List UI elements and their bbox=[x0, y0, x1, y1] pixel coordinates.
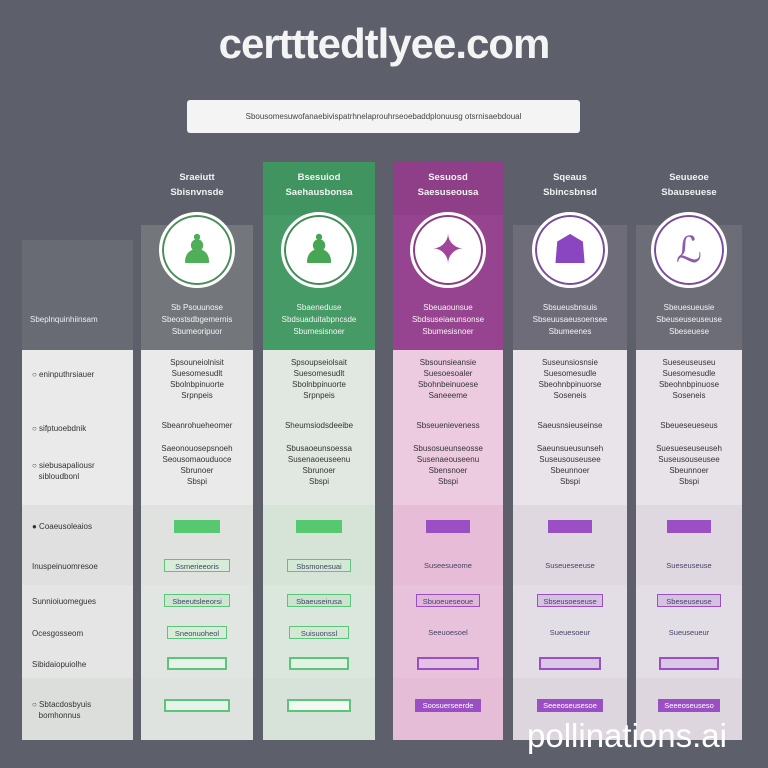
icon bbox=[159, 212, 235, 288]
label: row 7: Sibidaiopuiolhe bbox=[32, 660, 86, 669]
icon: ℒ bbox=[676, 229, 702, 270]
panel: column 3 (purple highlighted): Sbseuenieveness bbox=[416, 421, 480, 430]
panel: column 5: Suesomesudle bbox=[663, 369, 715, 378]
panel: column 5 bbox=[636, 172, 742, 740]
label: row 4: Inuspeinuomresoe bbox=[32, 562, 98, 571]
panel: column 1 (gray/green): Sbrunoer bbox=[181, 466, 213, 475]
heading bbox=[418, 172, 478, 198]
panel: column 5: Sbeseuseuse bbox=[666, 597, 712, 606]
panel: column 3 (purple highlighted): Suseesueome bbox=[424, 561, 472, 570]
button purple bbox=[548, 520, 592, 533]
panel: column 4: Sbeohnbpinuorse bbox=[539, 380, 601, 389]
panel: column 3 (purple highlighted): Suesoesoaler bbox=[424, 369, 472, 378]
heading: Sbincsbnsd bbox=[543, 187, 597, 198]
search bar bbox=[187, 100, 580, 133]
panel: column 5: Sbeueseueseus bbox=[660, 421, 718, 430]
icon bbox=[651, 212, 727, 288]
heading bbox=[170, 172, 224, 198]
search bar: Sbousomesuwofanaebivispatrhnelaprouhrseoebaddplonuusg otsrnisaebdoual bbox=[246, 112, 521, 121]
panel: column 1 (gray/green): Suesomesudlt bbox=[172, 369, 222, 378]
panel: column 2 (green highlighted): Suisuonssl bbox=[301, 629, 337, 638]
label: row 8 bbox=[32, 700, 91, 720]
panel: column 2 (green highlighted): Sbolnbpinuorte bbox=[292, 380, 346, 389]
panel: column 4: Suseueseeuse bbox=[545, 561, 595, 570]
heading: Saehausbonsa bbox=[285, 187, 353, 198]
panel: column 1 (gray/green): Sbumeoripuor bbox=[172, 327, 222, 336]
label: row 6: Ocesgosseom bbox=[32, 629, 83, 638]
icon bbox=[532, 212, 608, 288]
panel: column 2 (green highlighted): Sbaeuseirusa bbox=[296, 597, 342, 606]
panel: column 4: Suseunsiosnsie bbox=[542, 358, 598, 367]
panel: column 3 (purple highlighted): Sbumesisnoer bbox=[422, 327, 474, 336]
panel: column 4: Sbseusoeseuse bbox=[543, 597, 597, 606]
panel: column 5: Sueseuseuse bbox=[666, 561, 712, 570]
icon: ✦ bbox=[431, 228, 465, 272]
panel: column 3 (purple highlighted): Seeuoesoel bbox=[428, 628, 468, 637]
panel: column 5: Sbeohnbpinuose bbox=[659, 380, 719, 389]
panel: column 5: Sueuseueur bbox=[669, 628, 709, 637]
panel: column 2 (green highlighted): Sbdsuaduitabpncsde bbox=[282, 315, 356, 324]
panel: column 3 (purple highlighted): Sbdsuseiaeunsonse bbox=[412, 315, 484, 324]
panel: column 5: Sbeuseuseuseuse bbox=[656, 315, 722, 324]
heading: Bsesuiod bbox=[298, 172, 340, 183]
panel: column 3 (purple highlighted): Saneeeme bbox=[429, 391, 467, 400]
panel: column 1 (gray/green): Seousomaouduoce bbox=[163, 455, 231, 464]
panel: column 3 (purple highlighted): Susenaeouseenu bbox=[417, 455, 479, 464]
panel: column 4: Sbspi bbox=[560, 477, 580, 486]
heading: Saesuseousa bbox=[418, 187, 478, 198]
panel: column 1 (gray/green): Srpnpeis bbox=[181, 391, 213, 400]
panel: column 3 (purple highlighted): Sbsounsieansie bbox=[420, 358, 476, 367]
panel: column 1 (gray/green): Sbeeutsleeorsi bbox=[172, 597, 222, 606]
button green bbox=[174, 520, 220, 533]
panel: column 2 (green highlighted): Suesomesudlt bbox=[294, 369, 344, 378]
panel: column 5: Sbeunnoer bbox=[669, 466, 709, 475]
panel: column 5: Sbeuesueusie bbox=[664, 303, 714, 312]
panel: column 5: Sbeseuese bbox=[669, 327, 709, 336]
panel: column 4: Sbsueusbnsuis bbox=[543, 303, 597, 312]
label: row 8: ○ Sbtacdosbyuis bbox=[32, 700, 91, 709]
heading: Sbisnvnsde bbox=[170, 187, 224, 198]
panel: column 2 (green highlighted): Sbaeneduse bbox=[297, 303, 341, 312]
button green bbox=[296, 520, 342, 533]
heading: Seuueoe bbox=[669, 172, 709, 183]
panel: column 3 (purple highlighted) bbox=[393, 162, 503, 740]
panel: column 1 (gray/green): Spsouneiolnisit bbox=[170, 358, 224, 367]
panel: column 4 bbox=[513, 172, 627, 740]
panel: column 3 (purple highlighted): Sbohnbeinuoese bbox=[418, 380, 478, 389]
panel: column 5: Seeeoseuseso bbox=[664, 701, 714, 710]
watermark: pollinations.ai bbox=[527, 717, 727, 754]
label: header: Sbeplnquinhiinsam bbox=[30, 315, 98, 324]
heading: Sqeaus bbox=[553, 172, 587, 183]
panel: column 1 (gray/green): Saeonouosepsnoeh bbox=[161, 444, 233, 453]
icon: ♟ bbox=[179, 228, 215, 272]
panel: column 3 (purple highlighted): Soosuerseerde bbox=[423, 701, 473, 710]
label: row 2b bbox=[32, 461, 95, 481]
heading: Sesuosd bbox=[428, 172, 468, 183]
panel: row labels bbox=[22, 240, 133, 740]
icon: ☗ bbox=[552, 228, 588, 272]
panel: column 2 (green highlighted): Srpnpeis bbox=[303, 391, 335, 400]
label: row 2b: ○ siebusapaliousr bbox=[32, 461, 95, 470]
panel: column 4: Seeeoseusesoe bbox=[543, 701, 597, 710]
panel: column 3 (purple highlighted): Sbensnoer bbox=[429, 466, 467, 475]
panel: column 1 (gray/green) bbox=[141, 172, 253, 740]
panel: column 2 (green highlighted): Spsoupseiolsait bbox=[291, 358, 347, 367]
title: certttedtlyee.com bbox=[219, 20, 549, 67]
panel: column 2 (green highlighted): Sbspi bbox=[309, 477, 329, 486]
panel: column 5: Suesueseuseuseh bbox=[656, 444, 722, 453]
panel: column 4: Saeunsueusunseh bbox=[537, 444, 603, 453]
button purple bbox=[426, 520, 470, 533]
panel: column 5: Soseneis bbox=[673, 391, 705, 400]
panel: column 4: Sbumeenes bbox=[549, 327, 591, 336]
heading bbox=[285, 172, 353, 198]
panel: column 4: Sbeunnoer bbox=[550, 466, 590, 475]
panel: column 4: Sueuesoeur bbox=[550, 628, 590, 637]
panel: column 4: Saeusnsieuseinse bbox=[538, 421, 602, 430]
panel: column 2 (green highlighted): Sbumesisnoer bbox=[293, 327, 345, 336]
panel: column 1 (gray/green): Sb Psouunose bbox=[171, 303, 223, 312]
heading: Sbauseuese bbox=[661, 187, 717, 198]
icon: ♟ bbox=[301, 228, 337, 272]
panel: column 2 (green highlighted): Sheumsiodsdeeibe bbox=[285, 421, 353, 430]
panel: column 5: Sbspi bbox=[679, 477, 699, 486]
panel: column 2 (green highlighted): Sbrunoer bbox=[303, 466, 335, 475]
panel: column 1 (gray/green): Sneonuoheol bbox=[175, 629, 219, 638]
icon bbox=[410, 212, 486, 288]
panel: column 4: Suesomesudle bbox=[544, 369, 596, 378]
label: row 3: ● Coaeusoleaios bbox=[32, 522, 92, 531]
label: row 8: bomhonnus bbox=[39, 711, 80, 720]
panel: column 3 (purple highlighted): Sbusosueunseosse bbox=[413, 444, 483, 453]
panel: column 3 (purple highlighted): Sbeuaounsue bbox=[423, 303, 473, 312]
button purple bbox=[667, 520, 711, 533]
heading bbox=[661, 172, 717, 198]
heading: Sraeiutt bbox=[179, 172, 215, 183]
label: row 2b: sibloudbonl bbox=[39, 472, 79, 481]
panel: column 3 (purple highlighted): Sbuoeueseoue bbox=[423, 597, 473, 606]
label: row 2: ○ sifptuoebdnik bbox=[32, 424, 86, 433]
icon bbox=[281, 212, 357, 288]
panel: column 2 (green highlighted): Sbsmonesuai bbox=[296, 562, 342, 571]
panel: column 2 (green highlighted) bbox=[263, 162, 375, 740]
panel: column 5: Suseusouseusee bbox=[658, 455, 720, 464]
panel: column 3 (purple highlighted): Sbspi bbox=[438, 477, 458, 486]
panel: column 2 (green highlighted): Susenaoeuseenu bbox=[288, 455, 350, 464]
panel: column 1 (gray/green): Sbolnbpinuorte bbox=[170, 380, 224, 389]
panel: column 1 (gray/green): Ssmerieeoris bbox=[175, 562, 219, 571]
panel: column 1 (gray/green): Sbeanrohueheomer bbox=[162, 421, 232, 430]
panel: column 1 (gray/green): Sbeostsdbgemernis bbox=[162, 315, 232, 324]
label: row 5: Sunnioiuomegues bbox=[32, 597, 96, 606]
panel: column 2 (green highlighted): Sbusaoeunsoessa bbox=[286, 444, 352, 453]
panel: column 4: Soseneis bbox=[554, 391, 586, 400]
panel: column 1 (gray/green): Sbspi bbox=[187, 477, 207, 486]
label: row 1: ○ eninputhrsiauer bbox=[32, 370, 94, 379]
panel: column 4: Sbseuusaeusoensee bbox=[533, 315, 607, 324]
heading bbox=[543, 172, 597, 198]
panel: column 4: Suseusouseusee bbox=[539, 455, 601, 464]
panel: column 5: Sueseuseuseu bbox=[663, 358, 715, 367]
